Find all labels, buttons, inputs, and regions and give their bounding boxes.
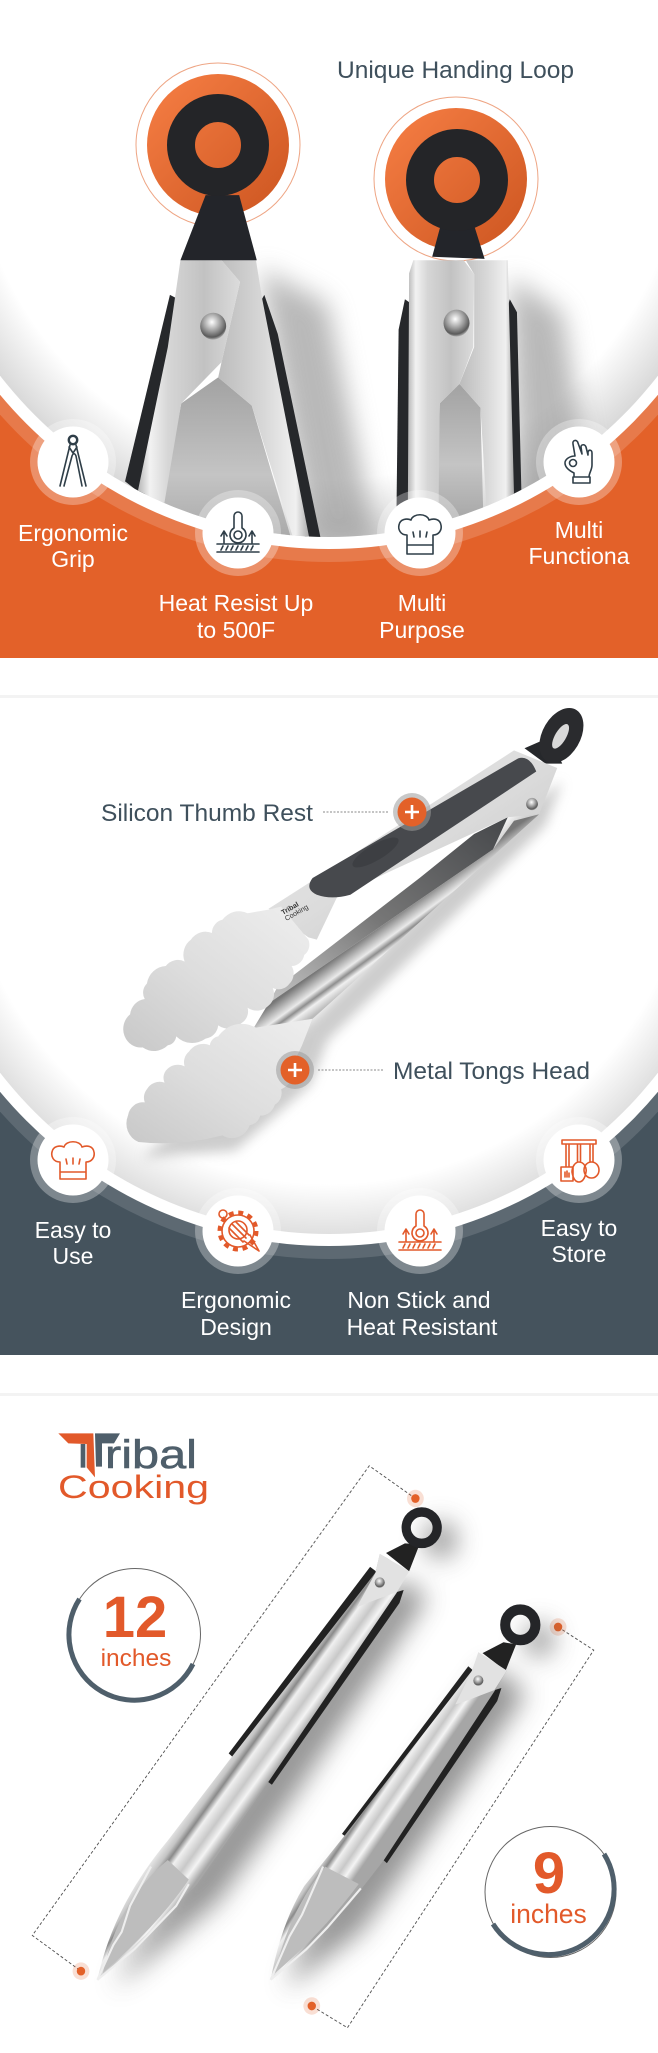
tong shadows xyxy=(260,269,596,546)
feature: heat resist up to 500F: Heat Resist Up xyxy=(159,590,313,616)
logo: tribal cooking: Cooking xyxy=(58,1469,209,1505)
logo: tribal cooking: ribal xyxy=(105,1433,197,1477)
callout: silicon thumb rest: Silicon Thumb Rest xyxy=(101,800,313,827)
12 inch dimension bracket xyxy=(32,1466,424,1980)
feature: easy to store: Store xyxy=(552,1241,606,1267)
engraved logo on tong: Cooking xyxy=(284,904,310,923)
lower scalloped head xyxy=(126,1019,313,1143)
9 inch badge: 9 xyxy=(533,1841,565,1906)
feature: easy to store xyxy=(536,1117,622,1267)
icon: heat thermometer xyxy=(217,512,259,552)
feature: ergonomic design: Ergonomic xyxy=(181,1287,291,1313)
feature: multi functional: Multi xyxy=(555,517,603,543)
separator xyxy=(0,1393,658,1396)
9 inch badge: inches xyxy=(510,1899,587,1929)
upper scalloped head xyxy=(123,907,309,1051)
feature: multi functional: Functiona xyxy=(528,543,630,569)
12 inch badge xyxy=(69,1568,200,1700)
callout: metal tongs head xyxy=(276,1051,590,1089)
icon: left black loop xyxy=(181,108,255,182)
logo: tribal cooking xyxy=(58,1433,209,1505)
feature: heat resist up to 500F xyxy=(159,490,313,643)
icon: gear and pencil xyxy=(219,1210,259,1251)
12 inch badge: inches xyxy=(101,1645,171,1672)
silicon thumb rest xyxy=(309,758,536,897)
feature: ergonomic design: Design xyxy=(200,1314,272,1340)
open tong product xyxy=(123,700,593,1157)
feature: ergonomic design xyxy=(181,1188,291,1340)
title: unique handing loop: Unique Handing Loop xyxy=(337,57,574,84)
lower arm xyxy=(254,814,539,1045)
rivet xyxy=(526,798,538,810)
shadow xyxy=(285,1624,554,1989)
9 inch tong xyxy=(271,1610,554,1989)
feature: multi purpose: Multi xyxy=(398,590,446,616)
logo mark xyxy=(58,1433,120,1477)
12 inch tong xyxy=(97,1512,457,1989)
upper arm xyxy=(269,750,557,940)
icon: left orange loop disc xyxy=(136,63,300,227)
icon: right orange loop disc xyxy=(374,97,538,261)
feature: multi purpose xyxy=(377,490,465,643)
feature: ergonomic grip xyxy=(18,419,128,572)
icon: chef hat xyxy=(399,515,441,554)
feature: easy to use: Easy to xyxy=(35,1217,111,1243)
separator xyxy=(0,695,658,698)
icon: chef hat xyxy=(52,1142,94,1179)
icon: ok hand xyxy=(565,440,592,483)
9 inch badge xyxy=(485,1826,616,1958)
close-up of two tongs xyxy=(125,195,596,546)
left tong xyxy=(125,195,321,540)
9 inch dimension bracket xyxy=(303,1618,594,2028)
inner slot xyxy=(269,817,508,1003)
panel: unique handing loop xyxy=(0,0,658,658)
icon: tongs xyxy=(60,436,86,486)
icon: right black loop xyxy=(420,143,494,217)
engraved logo on tong: Tribal xyxy=(280,901,300,917)
feature: non stick and heat resistant: Heat Resistant xyxy=(347,1314,498,1340)
12 inch badge: 12 xyxy=(103,1585,167,1650)
right tong xyxy=(397,226,522,518)
feature: easy to use: Use xyxy=(53,1243,93,1269)
slate banner xyxy=(0,1080,658,1355)
shadow xyxy=(113,1522,457,1989)
feature: easy to store: Easy to xyxy=(541,1215,617,1241)
engraved logo on tong xyxy=(280,902,309,920)
feature: multi functional xyxy=(528,419,630,569)
panel: tongs anatomy xyxy=(0,708,658,1355)
feature: non stick and heat resistant: Non Stick and xyxy=(347,1287,491,1313)
feature: heat resist up to 500F: to 500F xyxy=(197,617,275,643)
icon: hanging utensils xyxy=(561,1140,599,1182)
orange banner xyxy=(0,380,658,658)
feature: ergonomic grip: Ergonomic xyxy=(18,520,128,546)
callout: silicon thumb rest xyxy=(101,793,431,831)
panel: sizes xyxy=(32,1433,616,2028)
feature: ergonomic grip: Grip xyxy=(51,546,95,572)
feature: easy to use xyxy=(30,1117,116,1269)
icon: heat thermometer xyxy=(399,1210,441,1250)
tong shadow xyxy=(143,781,562,1157)
callout: metal tongs head: Metal Tongs Head xyxy=(393,1058,590,1085)
feature: multi purpose: Purpose xyxy=(379,617,465,643)
feature: non stick and heat resistant xyxy=(347,1188,498,1340)
hanging loop xyxy=(524,708,584,764)
